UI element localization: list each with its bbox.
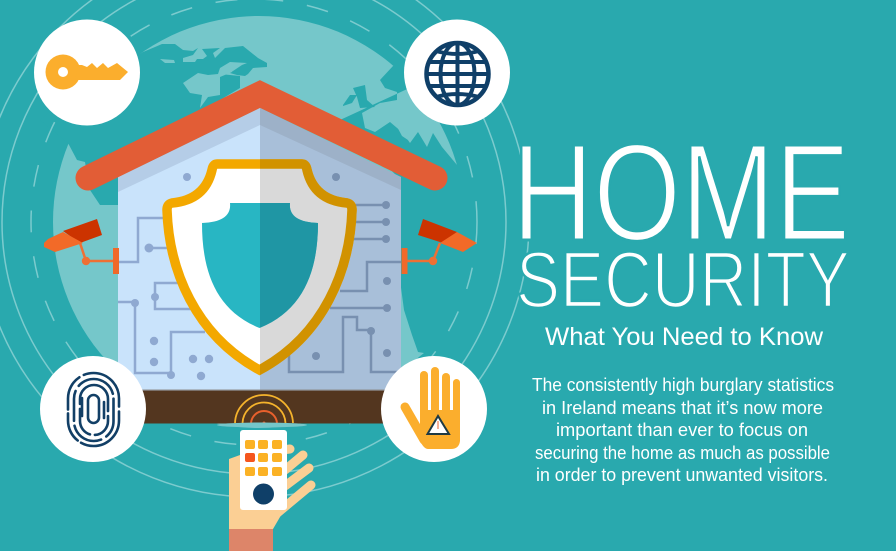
circuit traces left [118,173,213,380]
shield [167,164,352,370]
circuit traces right [289,173,401,372]
icon: globe [404,20,510,126]
icon: stop hand with warning [381,356,487,462]
icon: fingerprint [40,356,146,462]
house [118,108,401,453]
house walls [118,108,401,392]
icon: key [34,20,140,126]
left security camera [44,219,119,274]
orbit rings [0,0,529,497]
intro paragraph: important than ever to focus on [556,420,808,440]
subtitle: What You Need to Know [545,323,824,351]
globe [40,16,490,428]
signal waves [234,394,294,423]
shield core [202,203,318,328]
roof [88,94,435,178]
land masses [40,44,490,400]
intro paragraph: securing the home as much as possible [535,443,830,463]
remote control [240,430,287,510]
right security camera [402,219,477,274]
intro paragraph: in Ireland means that it’s now more [542,398,823,418]
intro paragraph: The consistently high burglary statistics [532,375,834,395]
wrist [229,529,273,551]
hand [229,449,311,529]
brown base with signal [142,390,385,424]
intro paragraph [532,375,834,485]
hand holding remote [229,430,311,551]
intro paragraph: in order to prevent unwanted visitors. [536,465,828,485]
